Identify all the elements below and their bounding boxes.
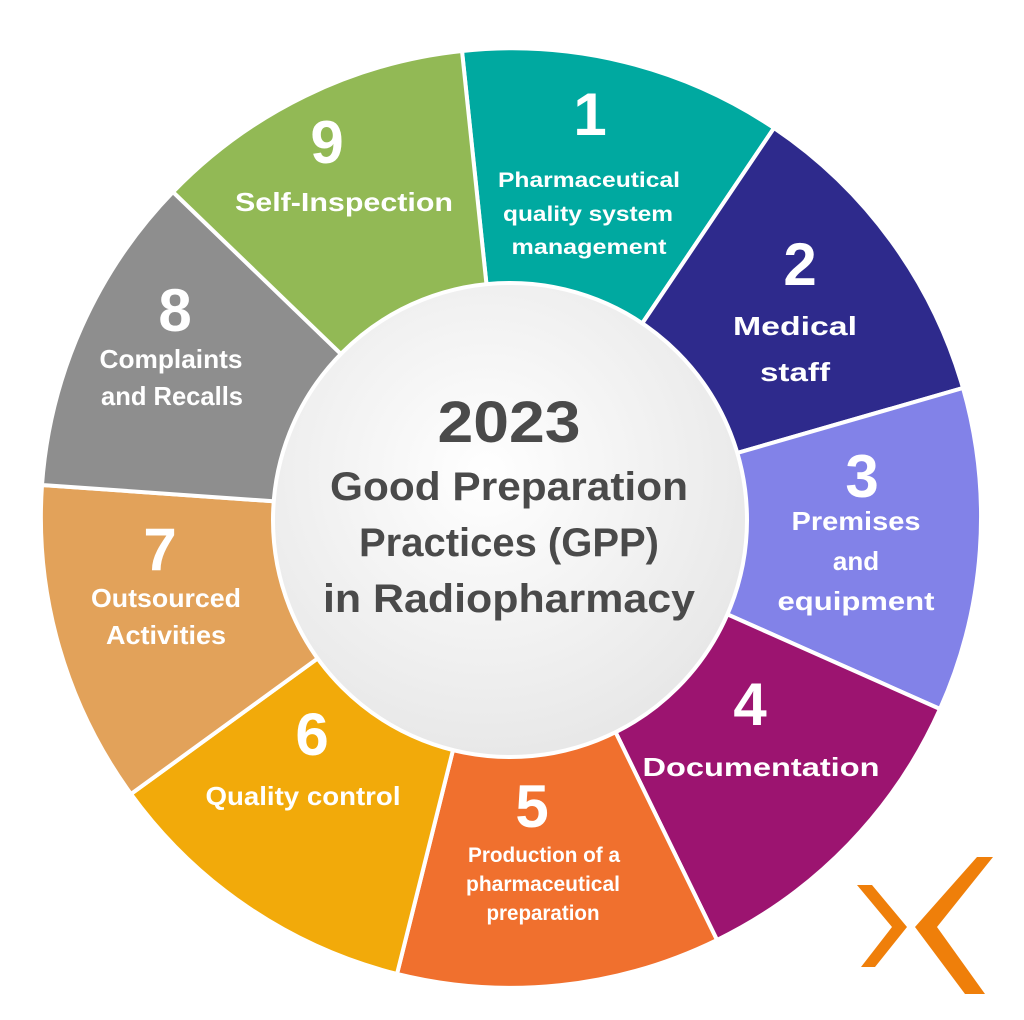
label 5: Production of a (468, 844, 620, 867)
center title: 2023 (438, 390, 580, 455)
center title (323, 390, 696, 621)
label 8 (100, 277, 243, 411)
label 7 (91, 516, 241, 650)
label 7: Activities (106, 620, 226, 650)
label 4 (642, 671, 880, 782)
label 1 (498, 81, 680, 259)
label 1: 1 (573, 81, 607, 148)
segment 8 (42, 192, 511, 518)
center title: in Radiopharmacy (323, 577, 696, 621)
segment 7 (41, 485, 511, 794)
center title: Good Preparation (330, 465, 688, 509)
logo (857, 857, 993, 994)
label 7: 7 (143, 516, 177, 583)
label 4: Documentation (642, 752, 880, 782)
label 9: 9 (310, 109, 344, 176)
label 5: pharmaceutical (466, 873, 620, 896)
label 5: 5 (515, 773, 549, 840)
label 2: 2 (783, 231, 817, 298)
label 1: quality system (503, 203, 673, 226)
label 9: Self-Inspection (235, 187, 453, 217)
label 6: Quality control (206, 781, 400, 811)
label 5 (466, 773, 620, 925)
center title: Practices (GPP) (359, 521, 659, 565)
label 2: staff (760, 357, 830, 387)
segment 9 (173, 51, 511, 518)
label 2: Medical (733, 311, 857, 341)
label 2 (733, 231, 857, 387)
label 7: Outsourced (91, 583, 241, 613)
segment 5 (397, 518, 717, 988)
label 3: and (833, 546, 879, 576)
segment 1 (462, 48, 774, 518)
label 4: 4 (733, 671, 767, 738)
label 3: equipment (778, 586, 935, 616)
label 3: Premises (792, 506, 920, 536)
label 5: preparation (486, 902, 600, 925)
label 1: Pharmaceutical (498, 169, 680, 192)
label 8: and Recalls (101, 381, 243, 411)
label 1: management (512, 236, 666, 259)
segment 4 (511, 518, 940, 940)
label 8: 8 (158, 277, 192, 344)
center circle (273, 283, 747, 757)
label 3 (778, 443, 935, 616)
label 3: 3 (845, 443, 879, 510)
label 8: Complaints (100, 344, 242, 374)
label 6: 6 (295, 701, 329, 768)
label 6 (206, 701, 400, 811)
segment 6 (131, 518, 511, 974)
segment 2 (511, 128, 963, 518)
label 9 (235, 109, 453, 217)
segment 3 (511, 388, 981, 709)
